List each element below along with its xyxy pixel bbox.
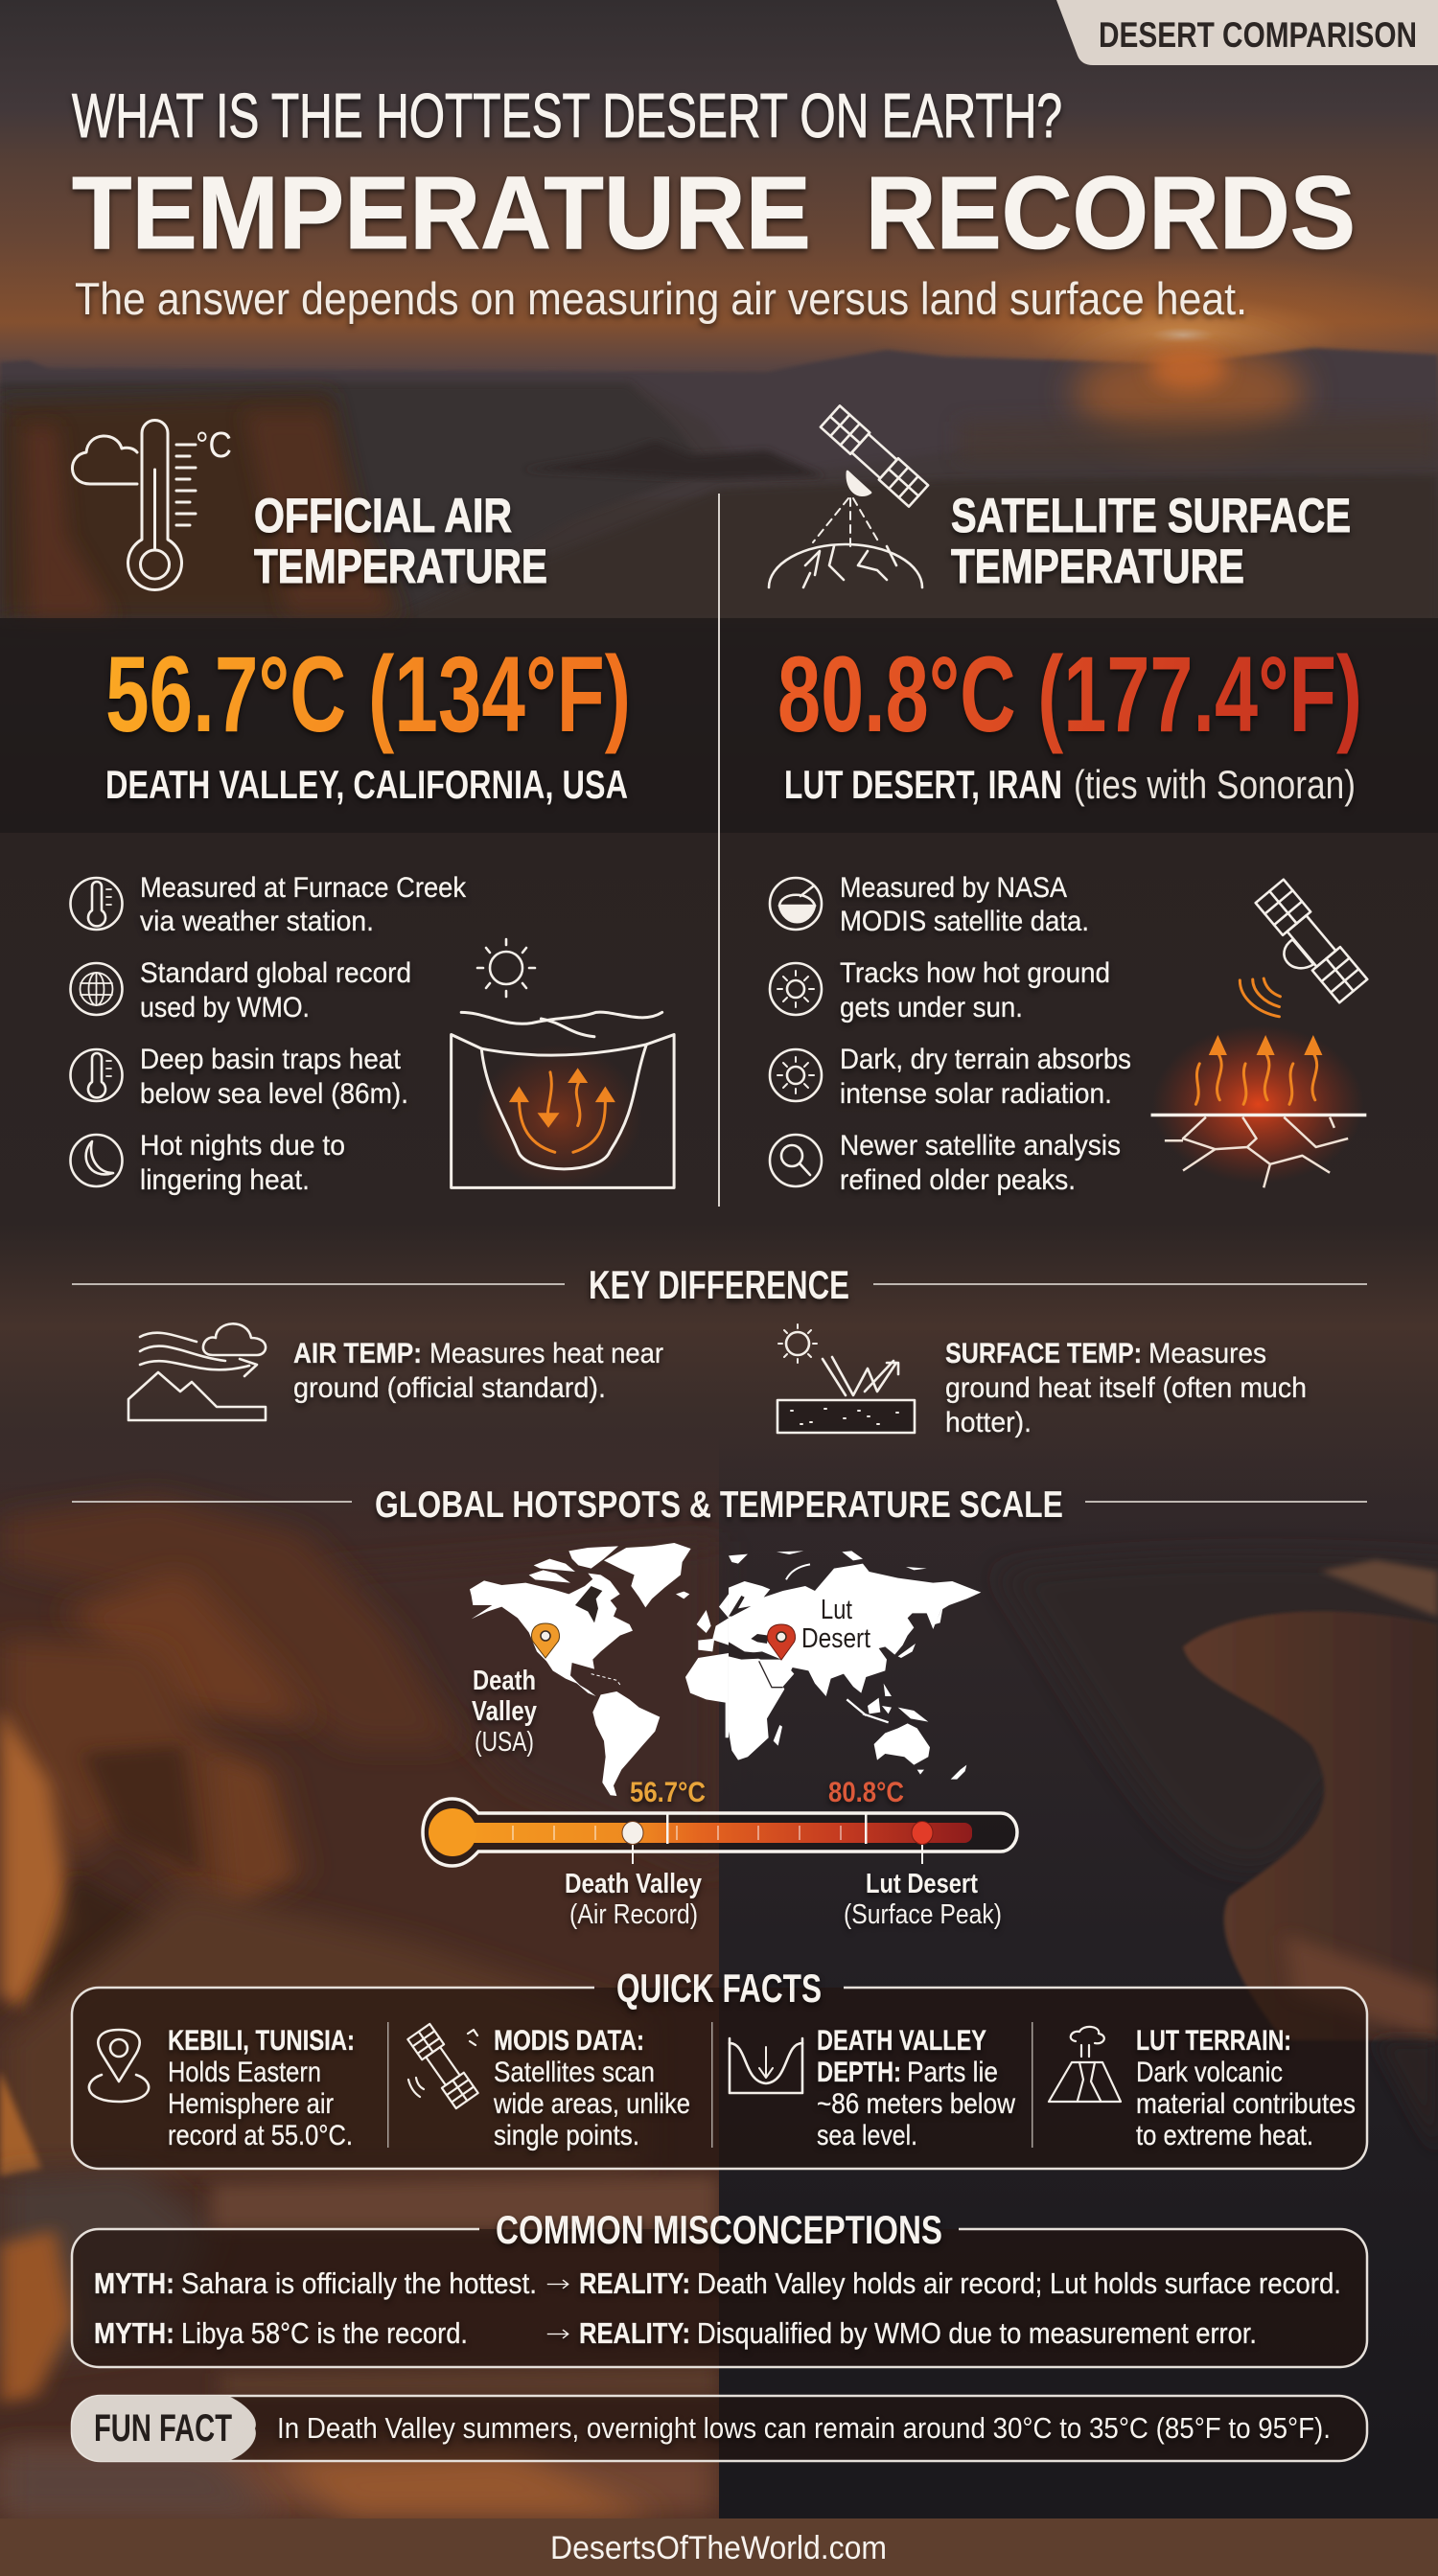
fact 3 <box>140 1044 408 1110</box>
fact: death valley depth <box>817 2025 1015 2151</box>
fact: kebili: Holds Eastern <box>168 2057 321 2088</box>
footer: DesertsOfTheWorld.com <box>550 2530 887 2566</box>
fact: kebili <box>168 2025 355 2151</box>
question heading: WHAT IS THE HOTTEST DESERT ON EARTH? <box>72 80 1062 150</box>
subtitle: The answer depends on measuring air versus land surface heat. <box>75 273 1247 324</box>
lower scene <box>0 1435 1438 2570</box>
text: air temp <box>293 1338 663 1404</box>
icon: sun badge 1 <box>770 963 822 1015</box>
marker: lut desert <box>912 1821 933 1864</box>
quick facts heading: QUICK FACTS <box>616 1966 822 2011</box>
center divider <box>718 494 720 1207</box>
fact 1: via weather station. <box>140 906 374 937</box>
fact 1: MODIS satellite data. <box>840 906 1089 937</box>
fact: lut terrain <box>1136 2025 1356 2151</box>
myth row 1: Death Valley holds air record; Lut holds surface record. <box>697 2266 1341 2300</box>
heading: satellite surface temperature: TEMPERATURE <box>951 540 1244 593</box>
fact: kebili: record at 55.0°C. <box>168 2120 353 2151</box>
fact: modis: Satellites scan <box>494 2057 655 2088</box>
icon: satellite dish badge <box>770 878 822 930</box>
myth row 2: → <box>545 2320 570 2347</box>
fact 1: Measured at Furnace Creek <box>140 872 467 904</box>
fact: modis <box>493 2025 690 2151</box>
myth row 2: Disqualified by WMO due to measurement error. <box>697 2316 1257 2350</box>
icon: magnifier badge <box>770 1135 822 1186</box>
icon: satellite small <box>407 2024 478 2108</box>
icon: valley depth <box>730 2038 802 2093</box>
section heading: key difference: KEY DIFFERENCE <box>589 1262 849 1307</box>
text: air temp: Measures heat near <box>429 1338 663 1369</box>
bar ticks <box>513 1826 841 1840</box>
location: lut desert <box>784 762 1356 807</box>
heading: official air temperature: TEMPERATURE <box>254 540 547 593</box>
icon: satellite with heated ground <box>1151 880 1367 1187</box>
bar fill <box>429 1808 972 1856</box>
text: air temp: AIR TEMP: <box>293 1338 422 1369</box>
icon: location pin <box>89 2030 149 2102</box>
fact 3: intense solar radiation. <box>840 1078 1112 1110</box>
myth row 1: Sahara is officially the hottest. <box>181 2266 537 2300</box>
fun fact pill: FUN FACT <box>94 2407 232 2450</box>
icon: surface reflection <box>777 1324 915 1433</box>
text: surface temp: Measures <box>1148 1338 1266 1369</box>
caption: lut desert: Lut Desert <box>866 1869 978 1899</box>
myth row 1: MYTH: <box>94 2266 174 2300</box>
caption: lut desert <box>844 1869 1002 1930</box>
icon: satellite over cracked earth <box>769 405 928 587</box>
fact: modis: wide areas, unlike <box>493 2088 690 2120</box>
myth row 2 <box>94 2316 1257 2350</box>
myth row 1: → <box>545 2270 570 2297</box>
fact 2: Standard global record <box>140 957 411 989</box>
icon: sun badge 2 <box>770 1049 822 1101</box>
text: surface temp: SURFACE TEMP: <box>945 1338 1142 1369</box>
pin: lut desert <box>767 1624 796 1660</box>
fact: lut terrain: material contributes <box>1136 2088 1356 2120</box>
record band <box>0 618 1438 833</box>
fact 4 <box>840 1130 1121 1196</box>
map: eurasia, africa and oceania <box>729 1551 981 1780</box>
world map <box>470 1543 981 1796</box>
heading: satellite surface temperature <box>951 489 1351 593</box>
fact 4: refined older peaks. <box>840 1164 1076 1196</box>
fact: death valley depth: ~86 meters below <box>817 2088 1015 2120</box>
text: air temp: ground (official standard). <box>293 1372 606 1404</box>
fact 4: Hot nights due to <box>140 1130 345 1162</box>
fact 4: Newer satellite analysis <box>840 1130 1121 1162</box>
icon: volcano <box>1049 2027 1121 2102</box>
fact: death valley depth: DEPTH: <box>817 2057 901 2088</box>
fact 1 <box>840 872 1089 937</box>
list: surface temperature facts <box>770 872 1131 1196</box>
fact 1 <box>140 872 467 937</box>
icon: globe badge <box>71 963 123 1015</box>
label: 80.8: 80.8°C <box>828 1777 904 1808</box>
fact: kebili: KEBILI, TUNISIA: <box>168 2025 355 2057</box>
fact 2: gets under sun. <box>840 992 1023 1024</box>
fact 3: Dark, dry terrain absorbs <box>840 1044 1131 1075</box>
icon: air wind over terrain <box>128 1323 266 1420</box>
air record value: 56.7°C (134°F) <box>105 634 631 754</box>
fact: death valley depth: Parts lie <box>907 2057 998 2088</box>
thermometer bar outline <box>423 1799 1017 1866</box>
fun fact pill <box>72 2396 256 2461</box>
map label: death valley: Death <box>473 1666 536 1696</box>
location: lut desert: LUT DESERT, IRAN <box>784 762 1062 807</box>
header titles <box>72 80 1356 324</box>
caption: death valley: (Air Record) <box>569 1899 698 1930</box>
text: surface temp: hotter). <box>945 1407 1032 1438</box>
fact 1: Measured by NASA <box>840 872 1067 904</box>
caption: lut desert: (Surface Peak) <box>844 1899 1002 1930</box>
location: death valley: DEATH VALLEY, CALIFORNIA, USA <box>105 762 628 807</box>
footer <box>0 2518 1438 2576</box>
panel: common misconceptions <box>72 2207 1367 2367</box>
fun fact text: In Death Valley summers, overnight lows can remain around 30°C to 35°C (85°F to 95°F). <box>277 2411 1331 2445</box>
myth row 2: MYTH: <box>94 2316 174 2350</box>
myth row 2: Libya 58°C is the record. <box>181 2316 468 2350</box>
map: americas and greenland <box>470 1543 729 1796</box>
label: 56.7: 56.7°C <box>630 1777 706 1808</box>
fact: lut terrain: Dark volcanic <box>1136 2057 1283 2088</box>
map label: lut desert: Lut <box>821 1595 852 1625</box>
icon: moon badge <box>71 1135 123 1186</box>
marker: death valley <box>622 1821 643 1864</box>
fact: death valley depth: DEATH VALLEY <box>817 2025 986 2057</box>
map label: death valley: Valley <box>472 1696 537 1727</box>
fact 4: lingering heat. <box>140 1164 310 1196</box>
map label: death valley: (USA) <box>475 1727 534 1758</box>
myth row 1: REALITY: <box>579 2266 690 2300</box>
fact: modis: single points. <box>494 2120 639 2151</box>
caption: death valley: Death Valley <box>565 1869 702 1899</box>
caption: death valley <box>565 1869 702 1930</box>
fact 2: used by WMO. <box>140 992 310 1024</box>
fact 2: Tracks how hot ground <box>840 957 1110 989</box>
fact 2 <box>840 957 1110 1024</box>
pin: death valley <box>531 1623 560 1658</box>
fact 3 <box>840 1044 1131 1110</box>
fact: lut terrain: LUT TERRAIN: <box>1136 2025 1291 2057</box>
fact 4 <box>140 1130 345 1196</box>
icon: thermometer badge <box>71 878 123 930</box>
fact 3: Deep basin traps heat <box>140 1044 402 1075</box>
fact: death valley depth: sea level. <box>817 2120 917 2151</box>
icon: thermometer badge 2 <box>71 1049 123 1101</box>
icon: thermometer with cloud <box>72 421 196 590</box>
heading: official air temperature: OFFICIAL AIR <box>254 489 512 542</box>
fact: modis: MODIS DATA: <box>494 2025 644 2057</box>
panel: quick facts <box>72 1966 1367 2169</box>
map label: lut desert: Desert <box>801 1623 870 1654</box>
label: degrees C: °C <box>196 426 232 466</box>
fact 2 <box>140 957 411 1024</box>
main title: TEMPERATURE RECORDS <box>72 154 1356 270</box>
myth row 1 <box>94 2266 1341 2300</box>
fact: lut terrain: to extreme heat. <box>1136 2120 1313 2151</box>
icon: sun over basin <box>452 939 674 1190</box>
location: lut desert: (ties with Sonoran) <box>1074 762 1356 807</box>
map label: lut desert <box>801 1595 870 1654</box>
section heading: global hotspots: GLOBAL HOTSPOTS & TEMPERATURE SCALE <box>375 1484 1063 1526</box>
misconceptions heading: COMMON MISCONCEPTIONS <box>496 2207 942 2252</box>
panel: fun fact <box>72 2396 1367 2461</box>
text: surface temp: ground heat itself (often much <box>945 1372 1307 1404</box>
list: air temperature facts <box>71 872 467 1196</box>
myth row 2: REALITY: <box>579 2316 690 2350</box>
map label: death valley <box>472 1666 537 1758</box>
heading: satellite surface temperature: SATELLITE SURFACE <box>951 489 1351 542</box>
fact: kebili: Hemisphere air <box>168 2088 334 2120</box>
text: surface temp <box>945 1338 1307 1438</box>
heading: official air temperature <box>254 489 547 593</box>
fact 3: below sea level (86m). <box>140 1078 408 1110</box>
tab: desert comparison <box>1056 0 1438 65</box>
temperature scale <box>423 1777 1017 1930</box>
